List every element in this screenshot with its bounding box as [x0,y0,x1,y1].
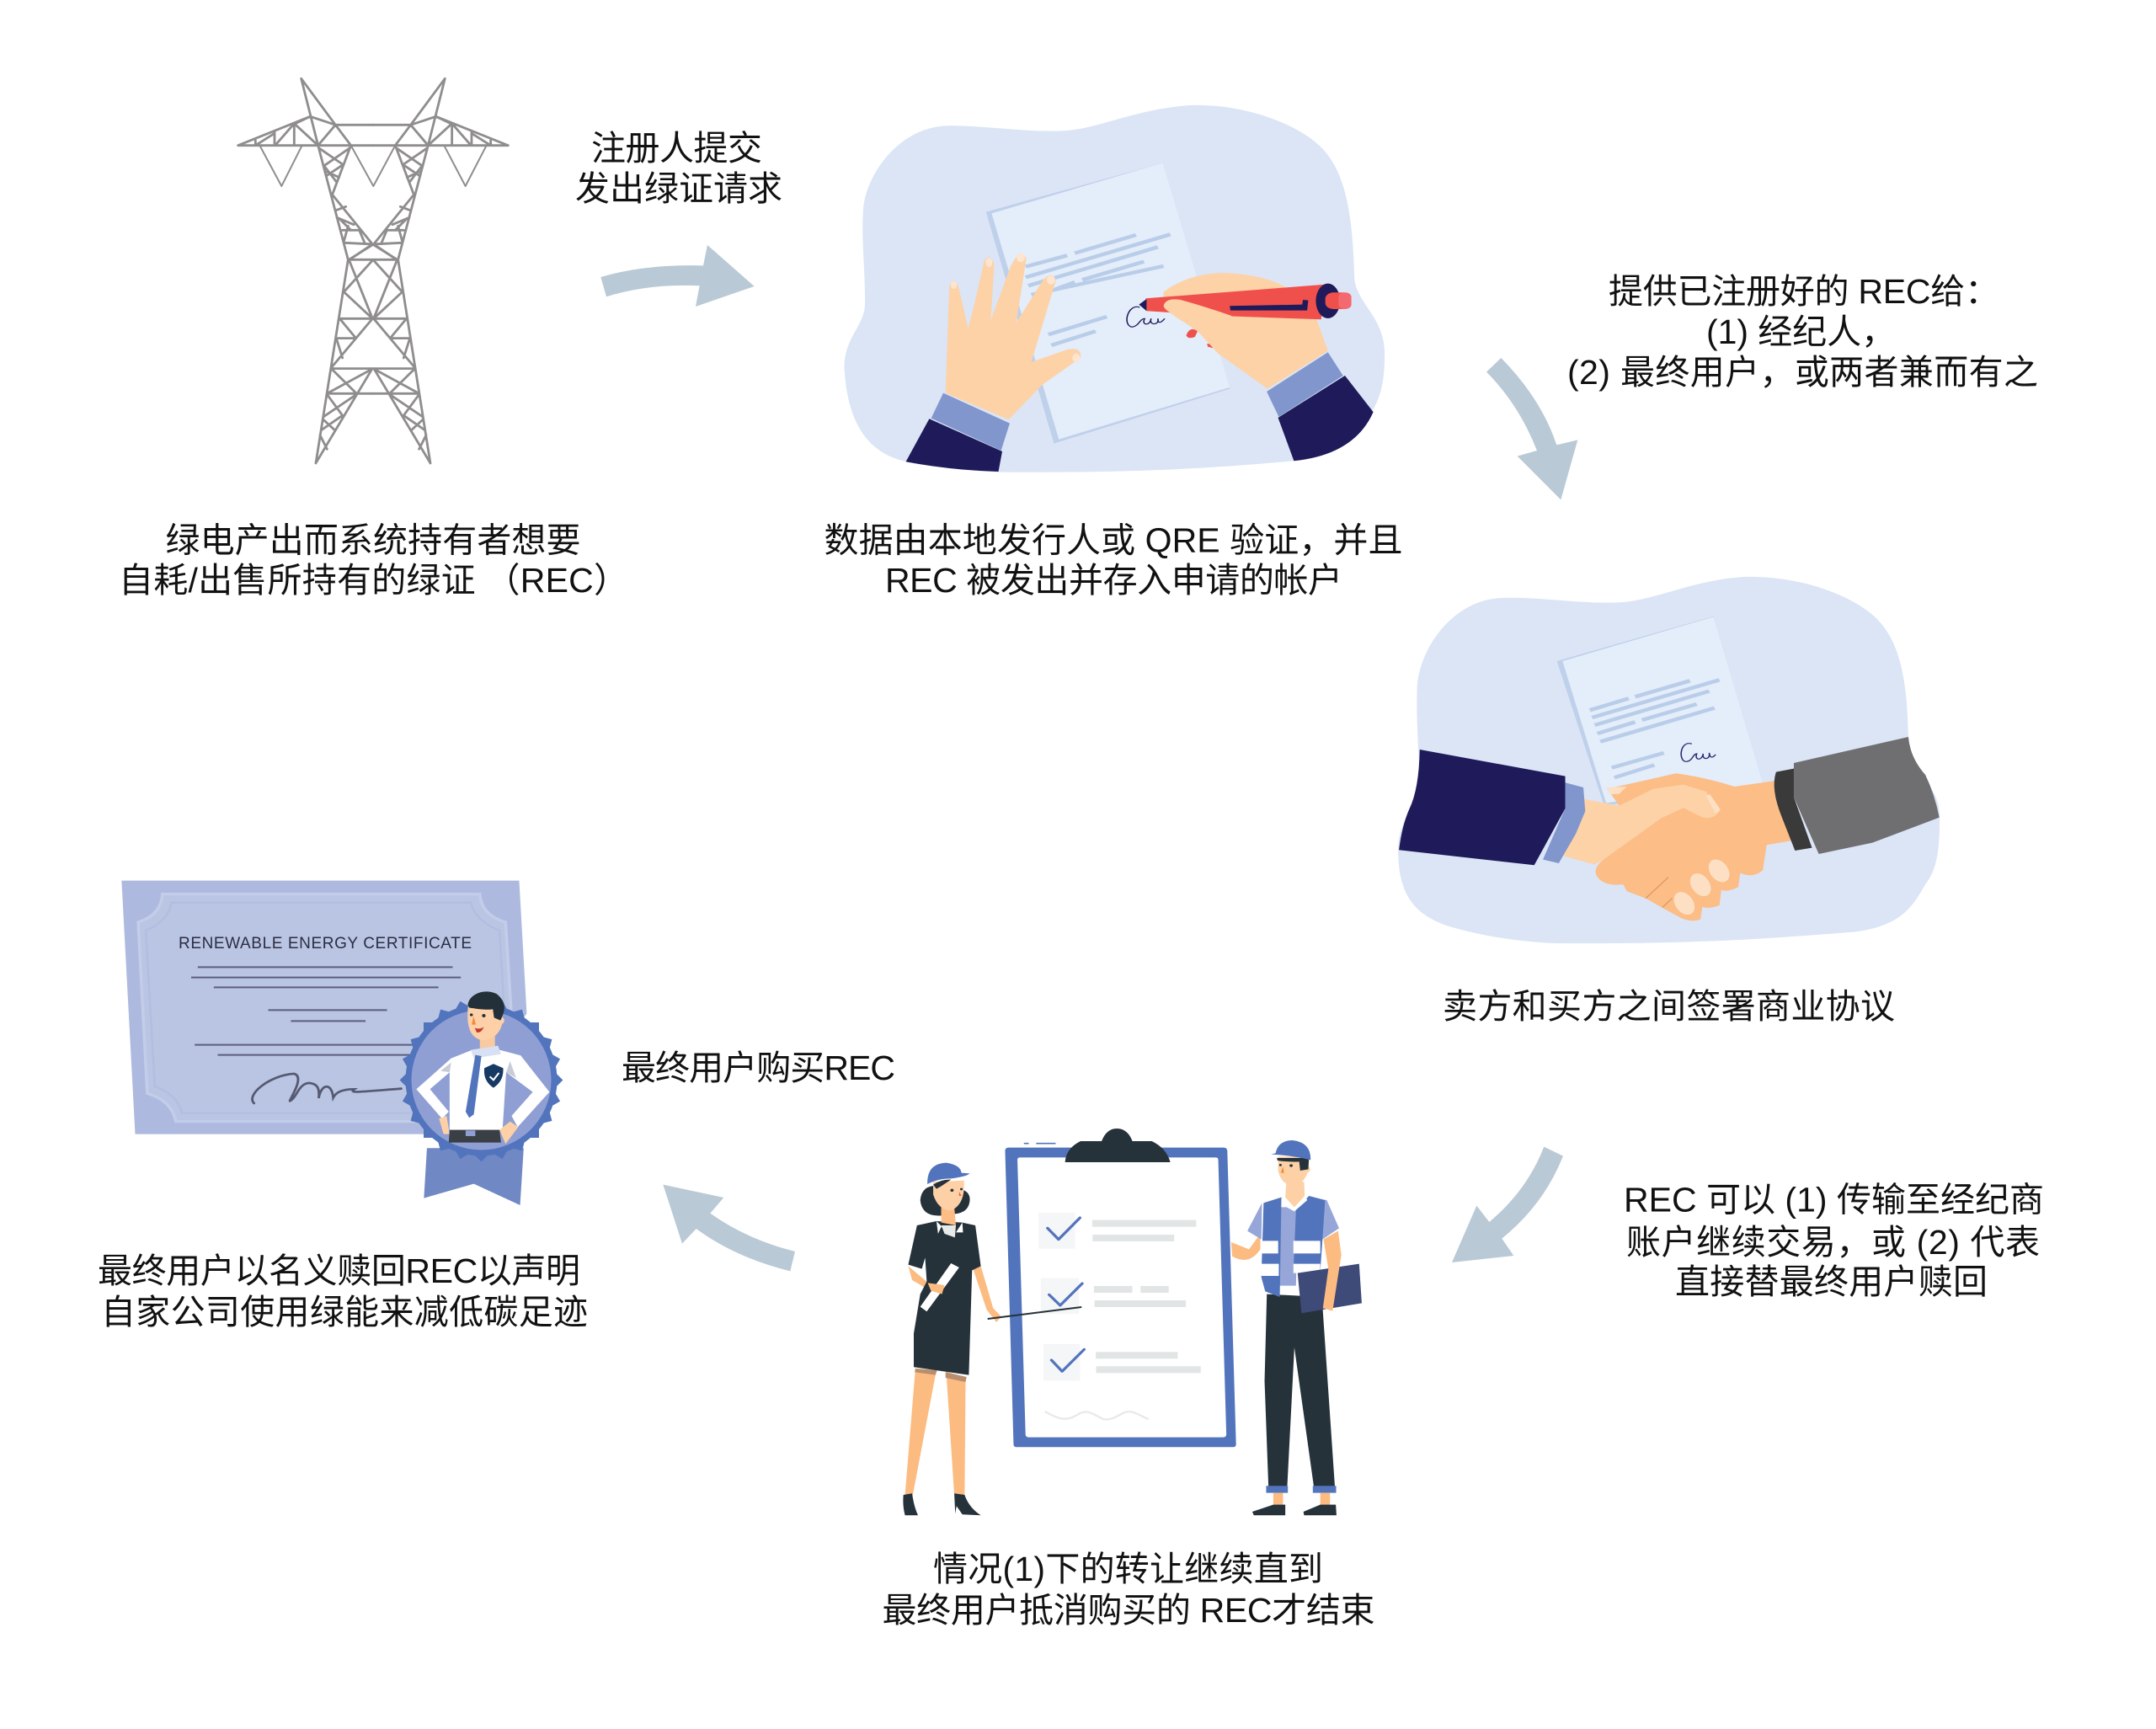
text: registrant submits: 注册人提交 [591,129,762,168]
text: signing caption: 数据由本地发行人或 QRE 验证，并且 [824,520,1403,559]
text: checklist caption [883,1550,1374,1630]
text: certificate caption [98,1251,588,1331]
text: checklist caption: 情况(1)下的转让继续直到 [933,1550,1323,1588]
arrow: tower to signing [600,245,755,307]
text: handshake caption: 卖方和买方之间签署商业协议 [1443,987,1895,1026]
text: REC transfer options [1624,1181,2044,1301]
certificate title: RENEWABLE ENERGY CERTIFICATE [179,935,472,953]
serrated badge [400,999,563,1161]
icon: transmission tower [238,78,508,463]
man with vest and folder [1231,1140,1362,1515]
text: signing caption [824,520,1403,600]
text: checklist caption: 最终用户抵消购买的 REC才结束 [883,1591,1374,1630]
pointer stick [988,1307,1081,1319]
illustration: handshake with contract [1398,577,1940,943]
text: tower caption: 自耗/出售所持有的绿证 （REC） [119,561,628,600]
text: REC transfer options: REC 可以 (1) 传输至经纪商 [1624,1181,2044,1219]
text: end user buys REC: 最终用户购买REC [622,1049,895,1087]
arrow: handshake to checklist [1452,1147,1563,1262]
text: provide registered REC: (1) 经纪人， [1706,312,1896,351]
illustration: hands signing document [844,105,1385,472]
text: tower caption: 绿电产出而系统持有者想要 [165,520,581,559]
woman presenter [903,1163,1001,1515]
text: registrant submits [575,129,782,208]
certificate sheet [121,881,526,1134]
arrow: checklist to certificate [663,1185,795,1271]
text: REC transfer options: 账户继续交易，或 (2) 代表 [1626,1223,2040,1262]
arrow: signing to handshake [1486,358,1577,499]
text: provide registered REC: 提供已注册好的 REC给： [1609,272,1999,311]
text: tower caption [119,520,628,600]
illustration: clipboard checklist with two workers [903,1129,1362,1515]
text: provide registered REC [1567,272,2038,392]
man in badge [416,991,549,1144]
text: registrant submits: 发出绿证请求 [575,169,782,208]
text: certificate caption: 自家公司使用绿能来减低碳足迹 [101,1293,588,1331]
clipboard [1005,1129,1236,1447]
text: signing caption: REC 被发出并存入申请的帐户 [885,561,1342,600]
text: REC transfer options: 直接替最终用户赎回 [1675,1262,1988,1301]
text: provide registered REC: (2) 最终用户，或两者兼而有之 [1567,353,2038,392]
text: certificate caption: 最终用户以名义赎回REC以声明 [98,1251,580,1290]
illustration: renewable energy certificate with badge [121,881,563,1205]
ribbon [424,1148,524,1205]
